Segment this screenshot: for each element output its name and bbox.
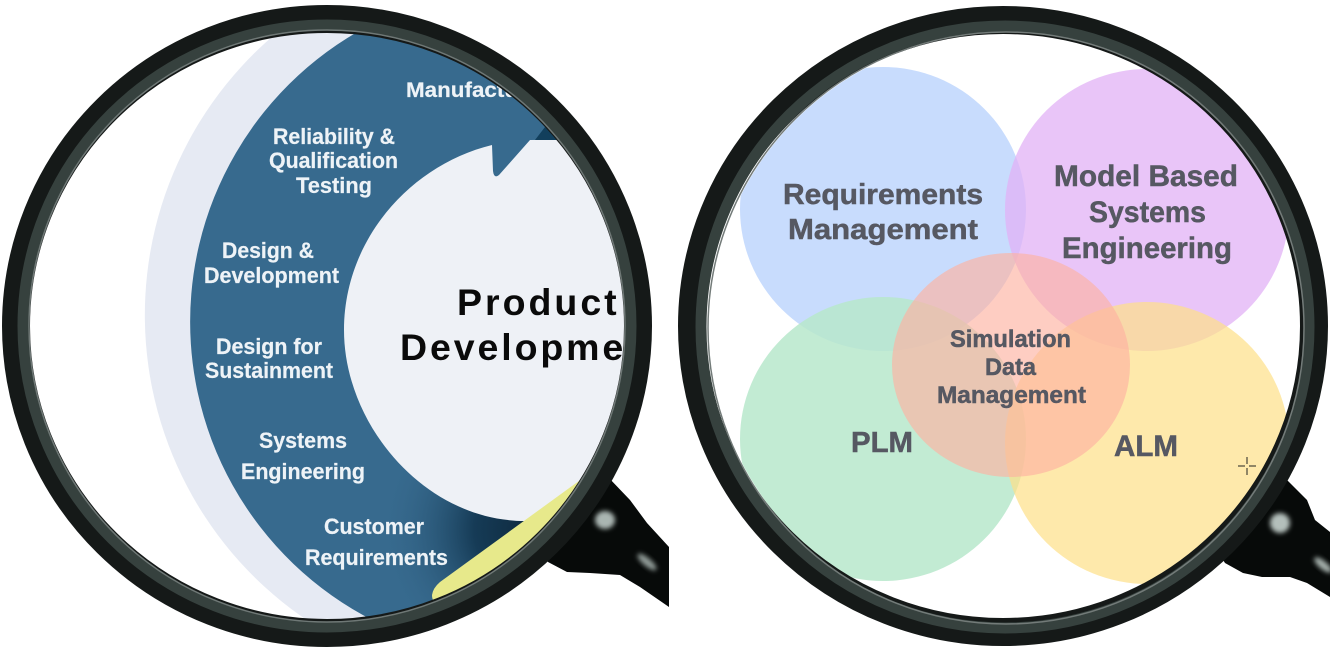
label: Model Based Systems Engineering [1054, 160, 1238, 265]
lens view: product development diagram [145, 33, 624, 619]
centre heading: Product Development [402, 288, 622, 368]
venn circle: simulation data management [892, 253, 1130, 477]
blue process arc [190, 34, 546, 616]
label: ALM: ALM [1114, 430, 1178, 463]
label: PLM: PLM [851, 427, 913, 459]
venn circle: model based systems engineering [1005, 69, 1289, 351]
process labels: Testing [296, 173, 372, 198]
label: Simulation Data Management: Data [985, 354, 1037, 381]
process labels: Development [204, 263, 340, 288]
process labels: Design & [222, 238, 314, 263]
label: Requirements Management: Requirements [783, 179, 983, 211]
process labels: Sustainment [205, 358, 334, 383]
venn circle: PLM [740, 297, 1026, 581]
left lens ring [16, 19, 638, 633]
label: Simulation Data Management: Management [937, 382, 1086, 409]
panel: right magnifying glass, simulation data management venn [692, 20, 1330, 640]
icon: right magnifier handle [1210, 480, 1330, 597]
label: Simulation Data Management [937, 326, 1086, 409]
centre heading: Product Development: Development [400, 326, 667, 368]
process labels: Requirements [305, 545, 448, 570]
label: Requirements Management: Management [788, 214, 978, 246]
process labels: Reliability & [273, 124, 395, 149]
process labels: Qualification [269, 148, 398, 173]
label: Model Based Systems Engineering: Systems [1089, 196, 1206, 229]
icon: left magnifier handle [530, 477, 669, 607]
centre heading: Product Development: Product [457, 281, 620, 323]
dark arrow tip [535, 127, 556, 140]
label: Model Based Systems Engineering: Model Based [1054, 160, 1238, 193]
process labels: Engineering [241, 459, 365, 484]
panel: left magnifying glass, product development [16, 19, 670, 662]
label: Model Based Systems Engineering: Engineering [1062, 232, 1232, 265]
white centre area with arrow notch [344, 140, 624, 521]
label: Simulation Data Management: Simulation [950, 326, 1071, 353]
icon: crosshair cursor [1238, 457, 1256, 475]
process labels: Systems [259, 428, 347, 453]
process labels [204, 79, 518, 570]
process labels: Design for [216, 334, 322, 359]
pale outer crescent [145, 33, 366, 619]
process labels: Customer [324, 514, 424, 539]
label: Requirements Management [783, 179, 983, 246]
lens view: venn diagram [740, 67, 1286, 584]
venn circle: ALM [1005, 302, 1289, 584]
process labels: Manufactu [406, 79, 518, 102]
venn circle: requirements management [740, 67, 1026, 351]
right lens ring [692, 20, 1314, 632]
yellow band [432, 480, 580, 600]
